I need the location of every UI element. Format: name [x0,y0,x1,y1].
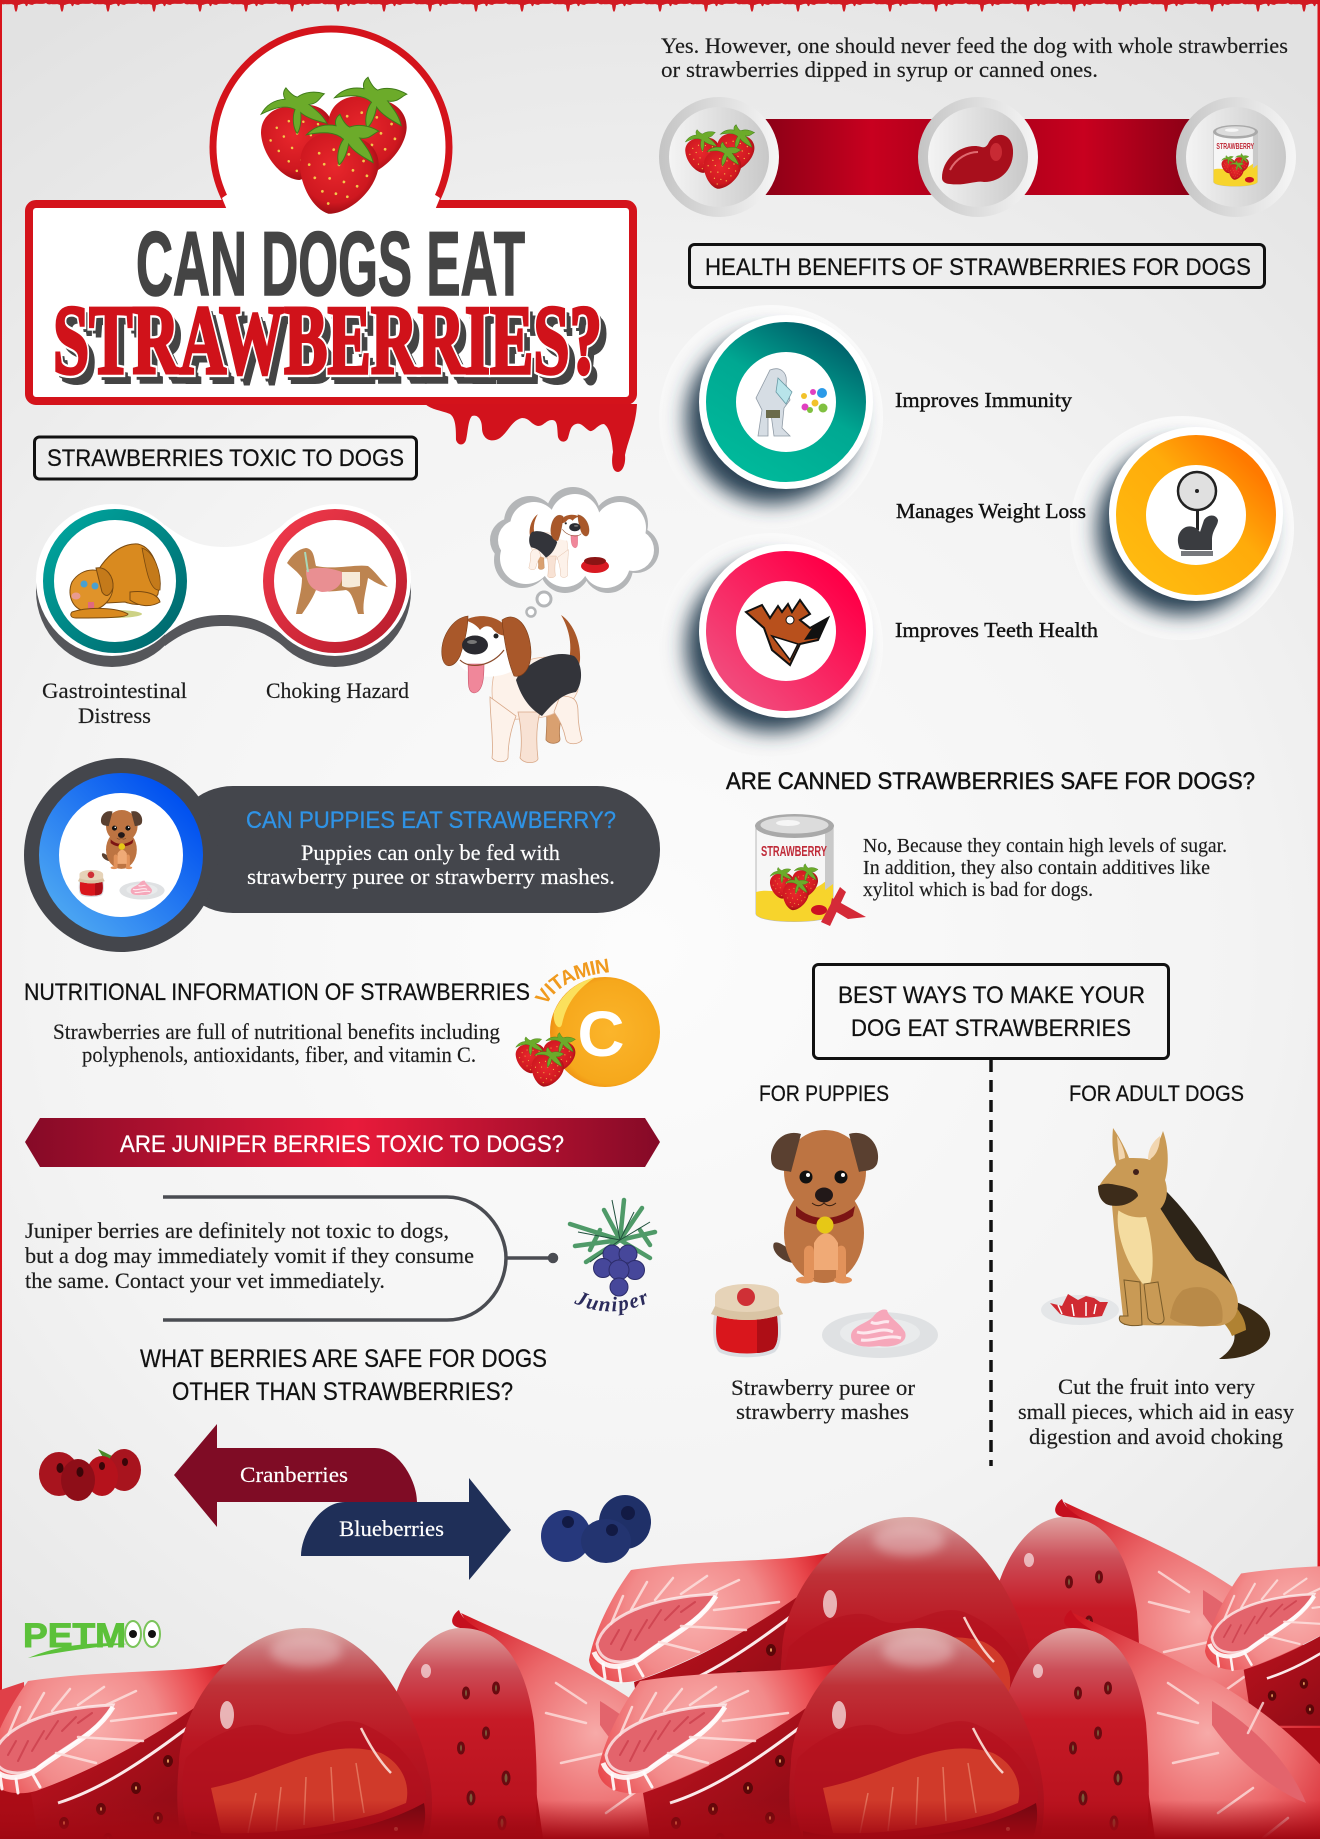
illustration: plate of cut strawberries [1041,1294,1119,1325]
icon: juniper: Juniper [574,1292,647,1316]
caption: adult dogs: Cut the fruit into very [1058,1374,1255,1399]
illustration: jar of puree [711,1284,783,1357]
band: three strawberry forms [659,97,1296,217]
heading: strawberries: STRAWBERRIES? [60,294,609,404]
label: gastrointestinal distress [42,678,187,728]
heading: are canned strawberries safe: ARE CANNED STRAWBERRIES SAFE FOR DOGS? [726,768,1255,795]
illustration: puppy [771,1130,878,1284]
benefit: improves immunity [670,306,873,520]
caption: adult dogs: digestion and avoid choking [1029,1424,1283,1449]
strawberry slices footer [0,1499,1320,1839]
icon: vitamin C: C [578,998,624,1070]
illustration: german shepherd [1098,1128,1270,1359]
dashed divider [989,1060,993,1466]
panel: toxicity dumbbell [36,504,411,728]
illustration: plate of mash [822,1310,938,1358]
icon: snarling dog [746,600,828,665]
column: for puppies: FOR PUPPIES [759,1081,889,1106]
icon: vitamin C [516,958,660,1087]
column: for adult dogs [1018,1081,1294,1449]
heading box: strawberries toxic to dogs: STRAWBERRIES TOXIC TO DOGS [47,445,404,472]
arrow: blueberries: Blueberries [339,1516,444,1541]
heading: what berries are safe [140,1345,547,1406]
label: improves teeth health: Improves Teeth Health [895,618,1098,642]
text: nutritional body: Strawberries are full of nutritional benefits including [53,1019,500,1044]
text: intro answer: or strawberries dipped in syrup or canned ones. [661,57,1098,82]
label: gastrointestinal distress: Distress [78,703,151,728]
caption: puppies: strawberry mashes [736,1399,909,1424]
heading box: best ways: BEST WAYS TO MAKE YOUR [838,982,1145,1009]
text: puppies answer: Puppies can only be fed with [301,840,560,865]
heading: strawberries: STRAWBERRIES? [53,285,602,395]
logo: petmoo [23,1617,160,1658]
title panel [29,29,633,404]
panel: can puppies eat strawberry [24,758,660,952]
text: nutritional body [53,1019,500,1067]
text: canned answer: In addition, they also contain additives like [863,857,1210,879]
benefit: improves teeth health [669,544,874,750]
benefit: manages weight loss [1070,416,1294,640]
icon: cranberries [39,1449,141,1501]
text: canned answer [863,835,1227,901]
column: for adult dogs: FOR ADULT DOGS [1069,1081,1244,1106]
arrow: blueberries [301,1478,511,1580]
heading: what berries are safe: OTHER THAN STRAWBERRIES? [172,1378,513,1406]
heading: nutritional information: NUTRITIONAL INFORMATION OF STRAWBERRIES [24,979,530,1006]
text: juniper body: Juniper berries are definitely not toxic to dogs, [25,1218,449,1243]
icon: blueberries [541,1495,651,1563]
caption: puppies [731,1375,916,1424]
red drips under title [425,404,637,472]
text: canned answer: xylitol which is bad for dogs. [863,879,1093,901]
icon: scale with dog [1178,472,1218,556]
caption: adult dogs: small pieces, which aid in easy [1018,1399,1294,1424]
text: intro answer [661,33,1288,82]
icon: three strawberries [257,72,414,221]
heading box: health benefits: HEALTH BENEFITS OF STRAWBERRIES FOR DOGS [705,254,1251,281]
icon: juniper [568,1198,658,1316]
text: juniper body: but a dog may immediately vomit if they consume [25,1243,474,1268]
heading box: best ways [814,964,1168,1058]
label: improves immunity: Improves Immunity [895,388,1072,412]
text: puppies answer [247,840,615,889]
icon: dog anatomy [287,548,388,614]
logo: petmoo: PETM [23,1617,126,1655]
icon: puppy with food [78,810,165,900]
text: juniper body: the same. Contact your vet immediately. [25,1268,385,1293]
icon circle: whole strawberries [659,97,779,217]
heading box: best ways: DOG EAT STRAWBERRIES [851,1015,1131,1042]
text: puppies answer: strawberry puree or strawberry mashes. [247,864,615,889]
label: manages weight loss: Manages Weight Loss [896,499,1086,523]
icon: armored knight and germs [756,369,828,436]
thought cloud with beagle [490,487,659,616]
banner: juniper berries: ARE JUNIPER BERRIES TOXIC TO DOGS? [120,1131,564,1158]
icon: vitamin C: VITAMIN [534,958,609,1002]
heading box: strawberries toxic to dogs [34,437,416,479]
text: nutritional body: polyphenols, antioxidants, fiber, and vitamin C. [82,1042,476,1067]
text: canned answer: No, Because they contain high levels of sugar. [863,835,1227,857]
text: juniper body [25,1218,474,1293]
banner: juniper berries [25,1118,660,1167]
label: gastrointestinal distress: Gastrointestinal [42,678,187,703]
illustration: beagle [442,615,582,763]
heading box: health benefits [690,244,1264,288]
column: for puppies [711,1081,938,1424]
heading: can dogs eat: CAN DOGS EAT [136,214,525,315]
caption: puppies: Strawberry puree or [731,1375,916,1400]
juniper bracket connector [163,1197,556,1320]
icon: crossed can [755,814,866,926]
text: puppies question: CAN PUPPIES EAT STRAWBERRY? [246,807,616,834]
heading: strawberries: STRAWBERRIES? [57,290,606,400]
text: intro answer: Yes. However, one should never feed the dog with whole strawberries [661,33,1288,58]
heading: strawberries: STRAWBERRIES? [53,285,602,395]
arrow: cranberries [174,1424,417,1527]
icon: sick dog [70,544,160,618]
label: choking hazard: Choking Hazard [266,678,409,703]
caption: adult dogs [1018,1374,1294,1449]
arrow: cranberries: Cranberries [240,1462,348,1487]
icon circle: syrup strawberries [918,97,1038,217]
heading: what berries are safe: WHAT BERRIES ARE SAFE FOR DOGS [140,1345,547,1373]
icon circle: canned strawberries [1176,97,1296,217]
